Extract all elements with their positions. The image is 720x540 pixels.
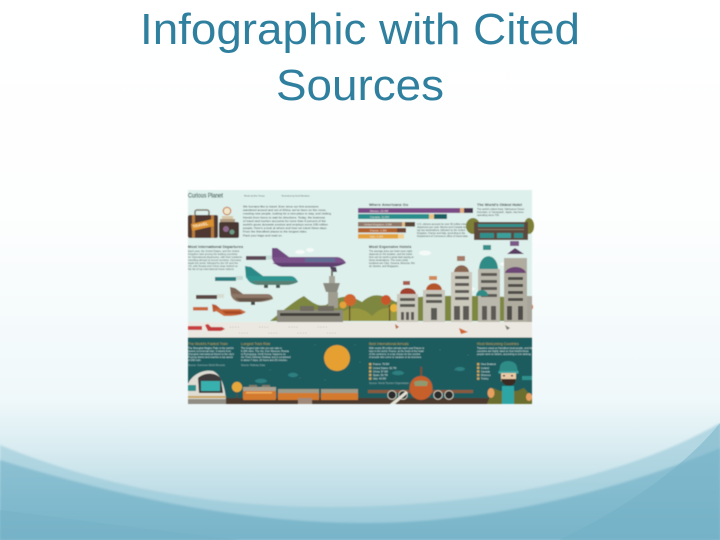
section text: fastest commercial train. It travels from — [188, 350, 231, 353]
section heading: Most Expensive Hotels — [369, 244, 411, 249]
section text: time can be worth a great deal paying at — [369, 256, 414, 259]
airport terminal and control tower — [277, 270, 343, 322]
legend: arrivals: United States: 62.7M — [373, 367, 396, 370]
section heading: The World's Fastest Train — [188, 342, 228, 346]
intro paragraph: wandered around and out of Africa, we've been on the move, — [243, 208, 326, 212]
bar chart note: top two destinations, followed by the United — [417, 229, 466, 232]
section text: the list of top international travel nations. — [188, 267, 235, 271]
illustration: hotel skyline — [397, 241, 532, 322]
illustration: welcoming man — [487, 361, 532, 404]
legend: welcoming countries: Iceland — [481, 367, 490, 370]
ground strip — [226, 398, 532, 404]
illustration: plane front view — [368, 367, 473, 404]
intro paragraph: Pack your bags and read on. — [243, 233, 283, 237]
intro paragraph: friends from home to wait for directions. Today, the business — [243, 215, 326, 219]
section text — [188, 347, 235, 367]
bar chart — [358, 208, 473, 239]
section text: leads the world, followed by the UK and the — [188, 261, 238, 265]
section text: depends on the location, and the travel — [369, 253, 413, 256]
intro paragraph: of travel and tourism accounts for more than 9 percent of the — [243, 219, 326, 223]
intro paragraph: We humans like to travel. Ever since our first ancestors — [243, 204, 319, 208]
hotel: orange dome — [423, 276, 445, 322]
pale ground band — [188, 322, 532, 338]
legend: arrivals — [369, 363, 410, 385]
bar chart: United Kingdom: 2.6M — [364, 222, 392, 226]
section text: in about 7 days, 20 hours and 25 minutes. — [241, 359, 288, 362]
pale ground band: •••• •••• •••• •••• — [239, 331, 337, 335]
section text — [477, 208, 525, 217]
section text: operating since 705. — [477, 214, 500, 217]
section text: countries are highly rated on how helpful those — [477, 350, 529, 353]
intro paragraph: meeting new people, looking for a new place to stay, and visiting — [243, 212, 331, 216]
section text: for international departures, with their residents — [188, 255, 243, 259]
intro paragraph — [243, 204, 331, 237]
section text: these destinations. The most costly — [369, 259, 409, 262]
intro paragraph: people. Here's a look at where and how we travel these days. — [243, 226, 327, 230]
plane: red propeller plane — [193, 304, 246, 316]
section heading: Best International Arrivals — [369, 342, 409, 346]
trees — [340, 294, 533, 321]
section: Most Welcoming Countries — [477, 342, 533, 381]
section text — [477, 347, 533, 356]
section: The World's Fastest Train — [188, 342, 235, 367]
legend: welcoming countries: Canada — [481, 370, 490, 373]
bar chart note: U.S. citizens account for over 60 million international — [417, 223, 476, 226]
section: The World's Oldest Hotel — [466, 203, 534, 240]
section text: of 268 mph. — [188, 359, 202, 362]
hills — [270, 295, 532, 321]
plane: teal airliner — [245, 266, 298, 288]
plane label: purple — [246, 256, 273, 260]
clouds on teal — [255, 367, 465, 383]
section text — [369, 347, 425, 359]
infographic: Curious Planet — [188, 190, 534, 404]
legend: arrivals: China: 57.6M — [373, 370, 388, 373]
intro paragraph: From the friendliest places to the longest rides. — [243, 230, 307, 234]
section: Where Americans Go — [358, 202, 476, 239]
section text: Kingdom rank among the leading countries — [188, 252, 238, 256]
section text: locations are Oslo, Geneva, Moscow, Rio — [369, 262, 415, 265]
section text: de Janeiro, and Singapore. — [369, 265, 399, 268]
bar chart note: Department of Commerce office of travel data. — [417, 235, 469, 238]
section text — [241, 347, 291, 367]
title second line: Sources — [276, 61, 444, 110]
illustration: bullet train — [188, 371, 226, 404]
section text: people were to visitors, according to one ranking. — [477, 353, 532, 356]
legend: arrivals: Italy: 43.6M — [373, 378, 386, 381]
clouds — [295, 248, 510, 291]
legend: welcoming countries — [477, 363, 496, 381]
section text: the Trans-Siberian Railway and is completed — [241, 356, 291, 359]
stars — [270, 345, 468, 380]
hotel: brown dome — [451, 256, 472, 322]
hotel: purple dome — [504, 241, 532, 322]
bar chart: France: 1.9M — [370, 228, 387, 232]
title: Infographic with Cited — [140, 5, 580, 54]
section text: US, with Russia and China close behind on — [188, 264, 238, 268]
tree: yellow — [232, 382, 242, 399]
section text: With nearly 80 million arrivals each year France is — [369, 347, 425, 350]
dark teal lower panel — [188, 338, 532, 404]
section: Best International Arrivals — [369, 342, 425, 385]
section text: tops in the world. France, at the heart of the heart — [369, 350, 424, 353]
infographic upper background — [188, 190, 532, 323]
plane: purple airliner — [272, 248, 346, 272]
legend: arrivals: Source: World Tourism Organization — [369, 382, 410, 385]
byline: Words by Ron Tewey Illustration by Scott Mendoza — [244, 195, 310, 198]
section text: The average price per hotel room night — [369, 250, 412, 253]
bar chart note: Kingdom, France and Italy, according to the — [417, 232, 466, 235]
illustration: oldest hotel — [466, 218, 534, 240]
section: Longest Train Ride — [241, 342, 291, 367]
section text: to Pyongyang, North Korea, happens on — [241, 353, 286, 356]
icon: travel suitcases and clock: TRAVEL — [192, 221, 209, 229]
section text — [188, 249, 243, 271]
section text: Source: Guinness World Records — [188, 364, 226, 367]
section heading: Longest Train Ride — [241, 342, 270, 346]
section text: 6,346 miles. The trip, from Moscow, Russia — [241, 350, 289, 353]
plane label: teal — [215, 276, 243, 281]
legend: welcoming countries: Turkey — [481, 378, 489, 381]
legend: welcoming countries: New Zealand — [481, 363, 496, 366]
bar chart: Canada: 11.6M — [370, 215, 390, 219]
pale ground band: •••• •••• •••• •••• — [230, 325, 328, 329]
section text: travelling abroad at record numbers. Germany — [188, 258, 242, 262]
section text: Pudong district and reaches a top speed — [188, 356, 233, 359]
bar chart: Mexico: 20.4M — [370, 209, 389, 213]
legend: arrivals: Spain: 56.7M — [373, 374, 388, 377]
section text: Travelers voted on friendliest local people, and the — [477, 347, 533, 350]
section heading: The World's Oldest Hotel — [477, 203, 522, 207]
section text: The longest train ride you can take is — [241, 347, 283, 350]
section text: The world's oldest hotel, Nishiyama Onsen — [477, 208, 525, 211]
section text: Shanghai International Airport to the city's — [188, 353, 235, 356]
section text: of people who come to vacation or do business. — [369, 356, 422, 359]
bar chart: Italy: 1.9M — [370, 234, 384, 238]
section text: Keiunkan, in Yamanashi, Japan, has been — [477, 211, 524, 214]
hotel: teal dome — [476, 245, 500, 322]
section text — [369, 250, 415, 268]
icon: sun — [324, 345, 350, 371]
section: Most International Departures — [188, 244, 243, 271]
plane label: brown — [196, 294, 224, 299]
icon: travel suitcases and clock — [188, 207, 239, 238]
section text: Source: Railway Data — [241, 364, 266, 367]
section text: Each year, the United States, and the United — [188, 249, 240, 253]
section heading: Most Welcoming Countries — [477, 342, 519, 346]
illustration: long train — [243, 385, 358, 404]
legend: welcoming countries: Morocco — [481, 374, 491, 377]
legend: arrivals: France: 79.5M — [373, 363, 389, 366]
section text: The Shanghai Maglev Train is the world's — [188, 347, 234, 350]
plane: brown propeller plane — [230, 287, 273, 305]
intro paragraph: world's gross domestic product and employs some 230 million — [243, 222, 328, 226]
bar chart heading: Where Americans Go — [369, 202, 409, 207]
section heading: Most International Departures — [188, 244, 243, 249]
section: Most Expensive Hotels — [369, 244, 415, 268]
section text: of the continent, is a top choice for the number — [369, 353, 421, 356]
hotel: red dome — [397, 281, 418, 322]
bar chart note: departures per year. Mexico and Canada are the — [417, 226, 471, 229]
bar chart note — [417, 223, 476, 238]
infographic heading: Curious Planet — [188, 192, 223, 200]
